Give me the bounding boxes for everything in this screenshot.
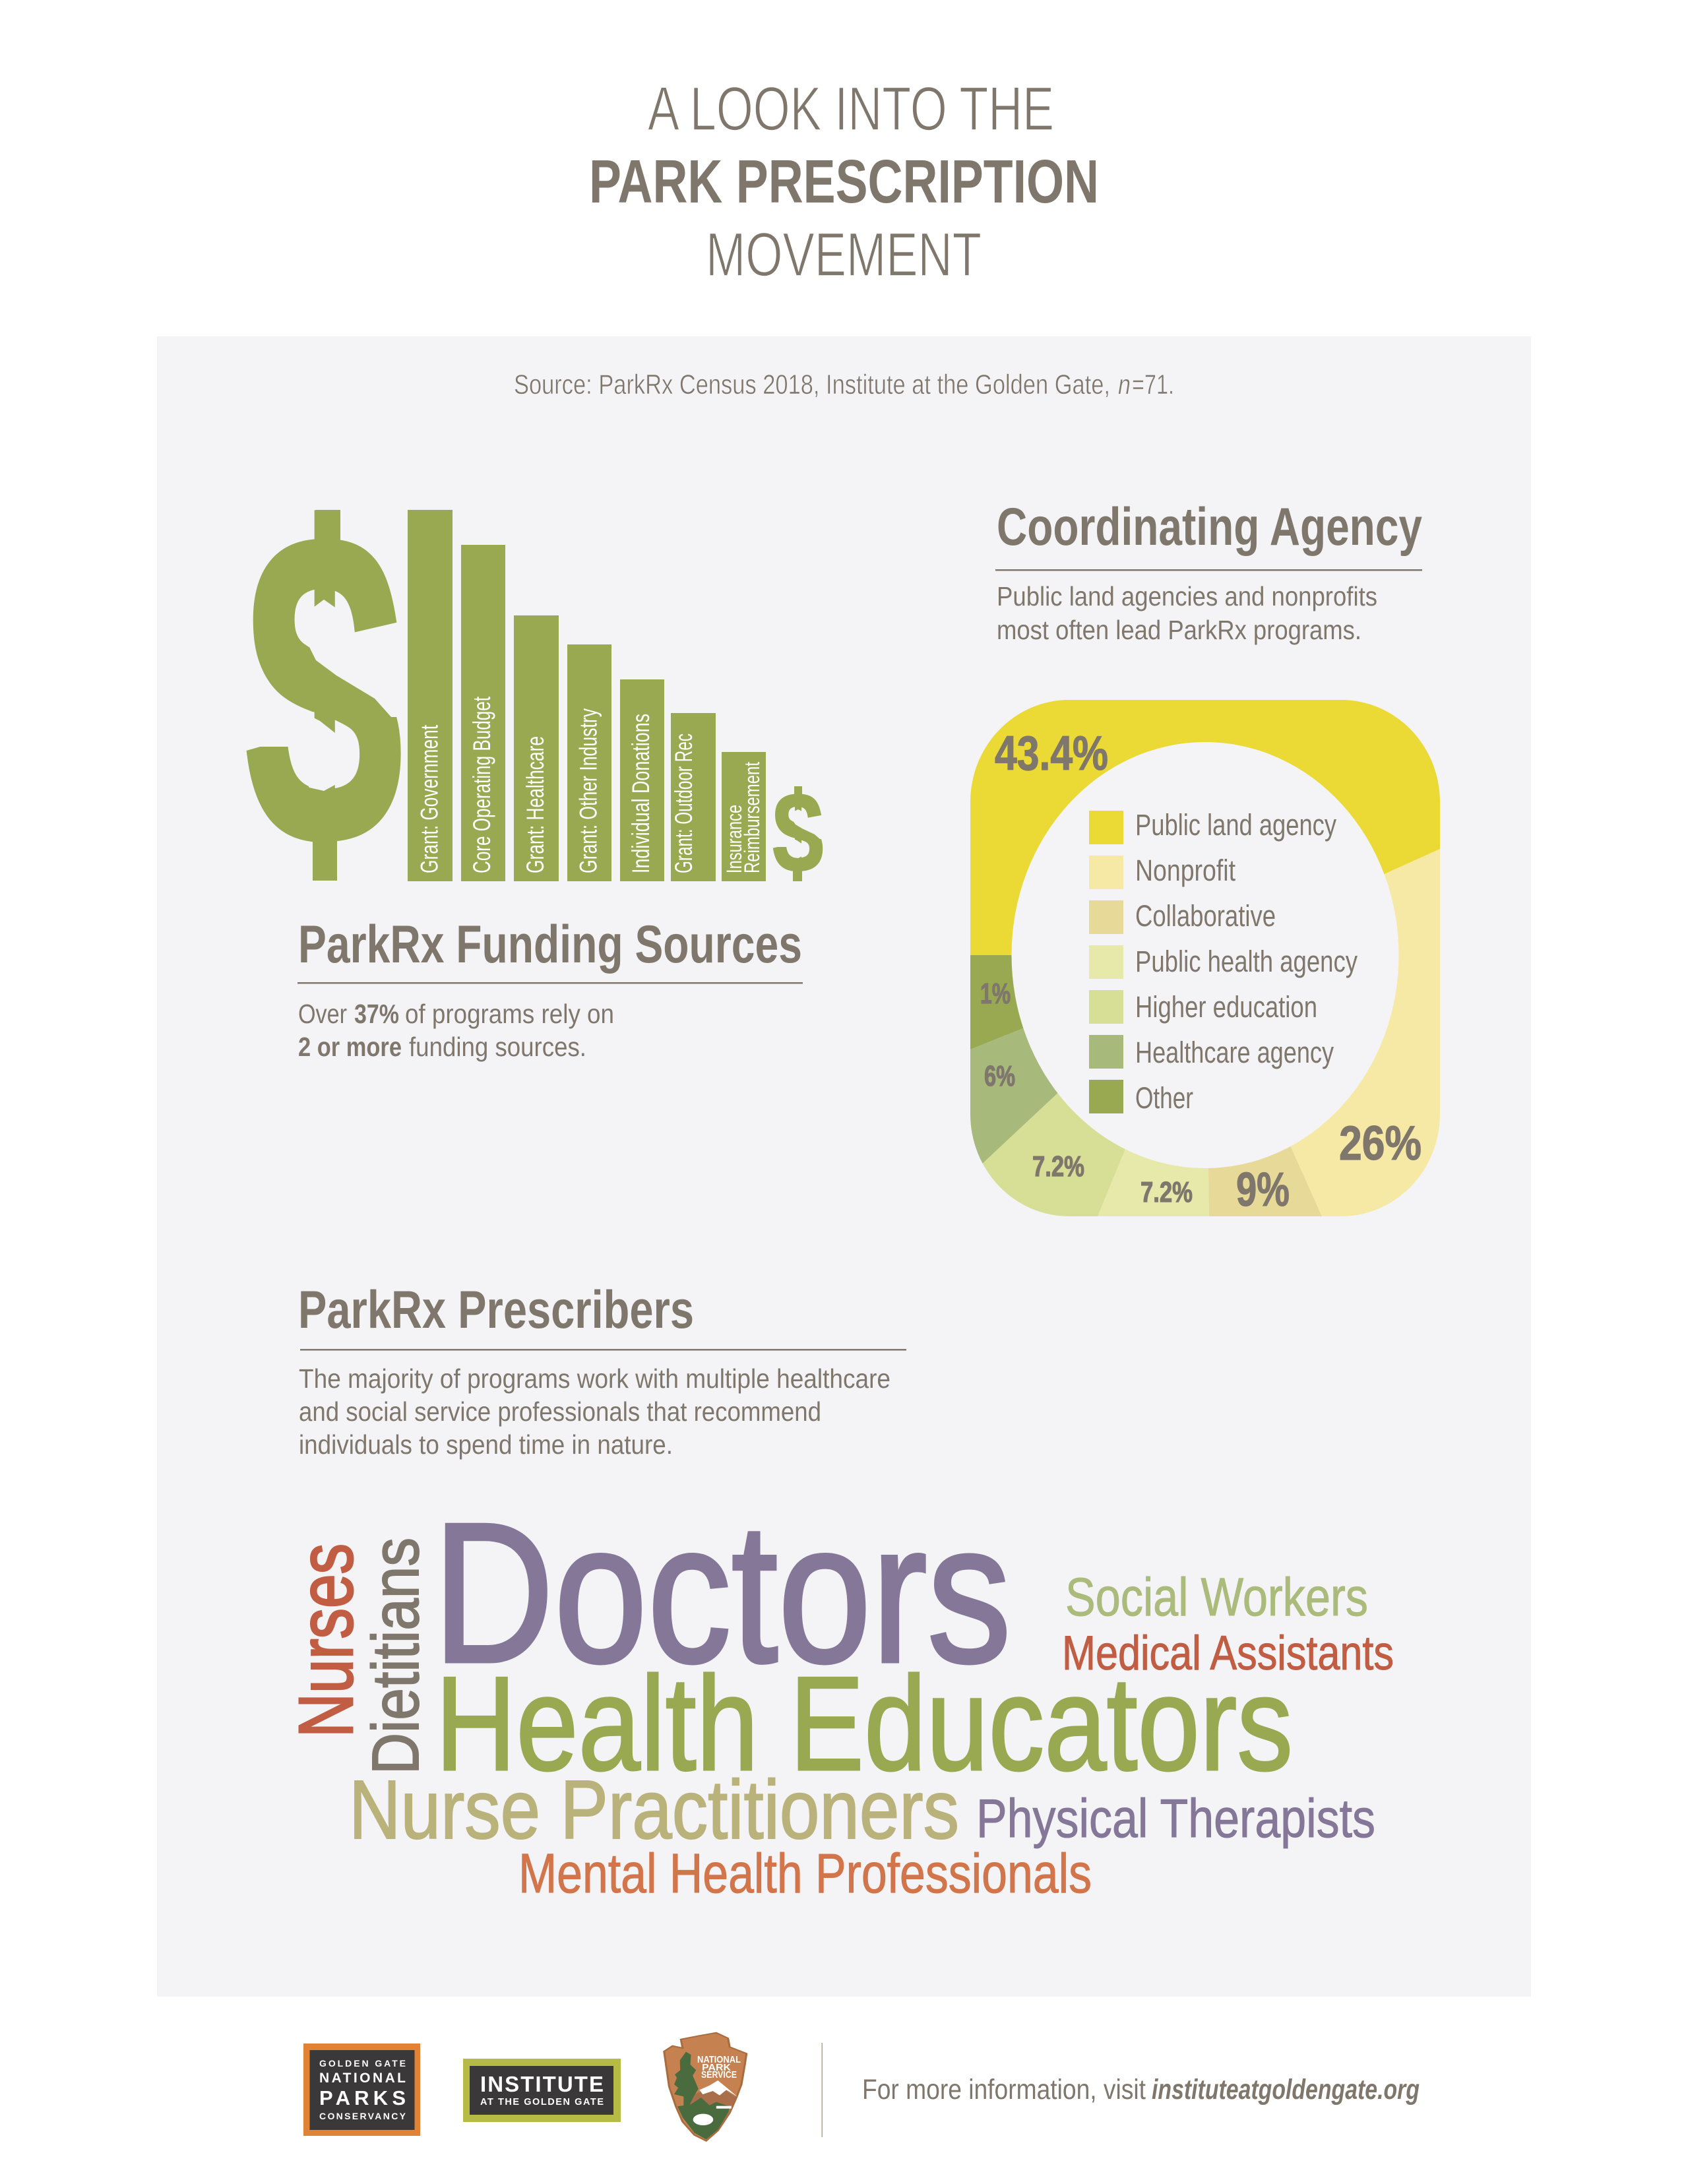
bar: Grant Government: Grant: Government xyxy=(416,724,443,873)
legend: Nonprofit xyxy=(1135,854,1235,887)
word cloud xyxy=(283,1482,1394,1904)
panel: coordinating agency xyxy=(970,507,1440,1216)
word: Physical Therapists: Physical Therapists xyxy=(976,1788,1375,1849)
title: A LOOK INTO THE xyxy=(648,74,1054,143)
heading rule xyxy=(995,569,1422,571)
logo: Golden Gate National Parks Conservancy: PARKS xyxy=(319,2086,406,2109)
legend: Public land agency xyxy=(1135,808,1336,842)
heading: coordinating agency: Coordinating Agency xyxy=(997,497,1422,557)
word: Health Educators: Health Educators xyxy=(435,1649,1293,1799)
heading: prescribers: ParkRx Prescribers xyxy=(298,1280,694,1340)
word: Medical Assistants: Medical Assistants xyxy=(1062,1627,1394,1680)
panel: background xyxy=(157,336,1531,1997)
logo: National Park Service arrowhead xyxy=(664,2033,747,2141)
bar: Grant Outdoor Rec xyxy=(670,713,716,881)
prescribers body text xyxy=(299,1363,891,1460)
funding body text: Over xyxy=(298,999,347,1029)
panel: funding sources xyxy=(244,443,823,1062)
word: Dietitians: Dietitians xyxy=(359,1538,433,1774)
bar: Individual Donations: Individual Donations xyxy=(627,714,654,873)
funding body text: 37% xyxy=(354,999,399,1029)
footer xyxy=(303,2033,1420,2141)
word: Doctors: Doctors xyxy=(433,1482,1011,1704)
legend: Higher education xyxy=(1135,990,1317,1024)
more information text: For more information, visit xyxy=(862,2074,1146,2106)
word: Nurses: Nurses xyxy=(283,1544,369,1737)
bar: Individual Donations xyxy=(620,679,664,881)
more information text xyxy=(862,2074,1420,2106)
prescribers body text: The majority of programs work with multiple healthcare xyxy=(299,1363,891,1394)
heading rule xyxy=(300,1349,906,1351)
legend xyxy=(1089,808,1358,1115)
panel: prescribers xyxy=(283,1280,1394,1904)
legend: Other xyxy=(1135,1081,1193,1115)
heading rule xyxy=(297,982,803,984)
more information text: instituteatgoldengate.org xyxy=(1152,2074,1420,2106)
logo: Golden Gate National Parks Conservancy: GOLDEN GATE xyxy=(319,2058,406,2069)
percent labels: 26% xyxy=(1339,1117,1422,1170)
word: Nurse Practitioners: Nurse Practitioners xyxy=(349,1763,959,1856)
source line: n xyxy=(1118,369,1131,400)
heading: funding sources: ParkRx Funding Sources xyxy=(298,915,802,974)
coordinating body text: most often lead ParkRx programs. xyxy=(997,615,1361,645)
funding body text: 2 or more xyxy=(298,1032,402,1062)
legend: Collaborative xyxy=(1135,899,1276,933)
coordinating body text xyxy=(997,581,1377,645)
logo: Golden Gate National Parks Conservancy: CONSERVANCY xyxy=(319,2111,406,2121)
word: Social Workers: Social Workers xyxy=(1065,1567,1368,1627)
icon: small dollar sign: $ xyxy=(773,769,823,895)
percent labels: 43.4% xyxy=(995,727,1108,780)
funding body text xyxy=(298,999,614,1062)
logo: Institute at the Golden Gate: INSTITUTE xyxy=(480,2072,604,2096)
legend: Public health agency xyxy=(1135,945,1358,978)
percent labels: 7.2% xyxy=(1141,1176,1193,1208)
percent labels xyxy=(980,727,1422,1216)
bar: Insurance Reimbursement: Reimbursement xyxy=(740,762,764,873)
logo: Golden Gate National Parks Conservancy: NATIONAL xyxy=(319,2071,406,2086)
prescribers body text: individuals to spend time in nature. xyxy=(299,1429,673,1460)
word: Mental Health Professionals: Mental Health Professionals xyxy=(518,1842,1092,1904)
logo: National Park Service arrowhead: PARK xyxy=(702,2062,731,2073)
bar: Core Operating Budget xyxy=(461,545,505,881)
coordinating body text: Public land agencies and nonprofits xyxy=(997,581,1377,611)
title: PARK PRESCRIPTION xyxy=(589,147,1099,216)
logo: Institute at the Golden Gate: AT THE GOLDEN GATE xyxy=(480,2097,604,2107)
percent labels: 7.2% xyxy=(1032,1150,1084,1183)
legend: Healthcare agency xyxy=(1135,1036,1334,1069)
bar chart: funding sources xyxy=(408,510,766,881)
logo: National Park Service arrowhead: SERVICE xyxy=(701,2069,737,2080)
icon: large dollar sign: $ xyxy=(246,443,402,936)
bar: Insurance Reimbursement: Insurance xyxy=(722,805,746,873)
source line: =71. xyxy=(1132,369,1174,400)
title: MOVEMENT xyxy=(706,220,982,289)
bar: Grant Healthcare: Grant: Healthcare xyxy=(522,736,549,873)
bar: Grant Other Industry xyxy=(567,644,611,881)
divider xyxy=(822,2043,823,2137)
funding body text: of programs rely on xyxy=(405,999,614,1029)
percent labels: 6% xyxy=(984,1060,1015,1092)
bar: Core Operating Budget: Core Operating Budget xyxy=(468,696,495,873)
funding body text: funding sources. xyxy=(409,1032,586,1062)
bar: Grant Outdoor Rec: Grant: Outdoor Rec xyxy=(670,733,697,873)
bar: Grant Healthcare xyxy=(514,615,559,881)
logo: Golden Gate National Parks Conservancy xyxy=(303,2044,420,2136)
percent labels: 9% xyxy=(1236,1164,1290,1216)
bar: Insurance Reimbursement xyxy=(722,752,766,881)
donut chart xyxy=(970,700,1440,1216)
logo: National Park Service arrowhead: NATIONAL xyxy=(697,2054,741,2065)
prescribers body text: and social service professionals that recommend xyxy=(299,1396,821,1427)
source line: Source: ParkRx Census 2018, Institute at the Golden Gate, xyxy=(514,369,1110,400)
bar: Grant Other Industry: Grant: Other Industry xyxy=(575,708,602,873)
logo: Institute at the Golden Gate xyxy=(463,2059,621,2122)
bar: Grant Government xyxy=(408,510,453,881)
title xyxy=(589,74,1099,289)
percent labels: 1% xyxy=(980,978,1011,1010)
